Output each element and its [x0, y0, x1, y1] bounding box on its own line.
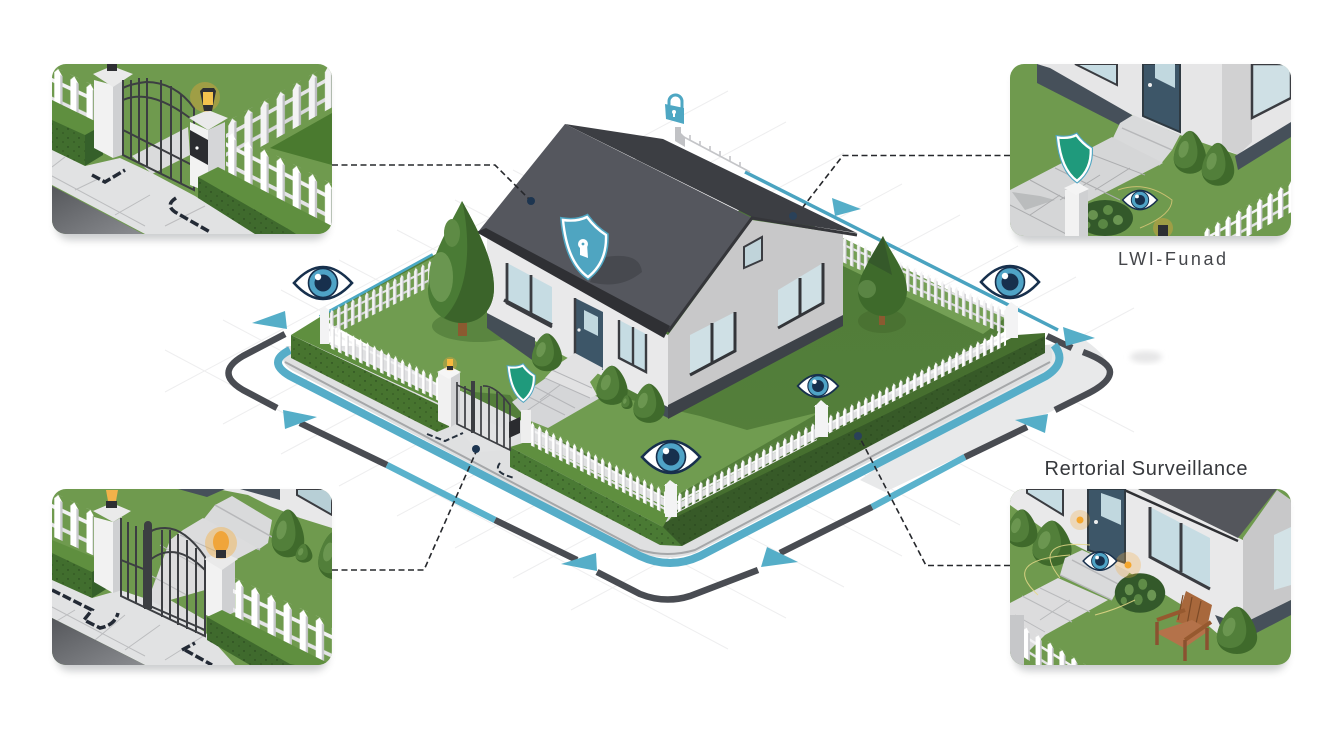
fence — [1022, 625, 1093, 701]
panel: gate detail card — [52, 63, 332, 234]
connector: lower gate card — [332, 445, 480, 570]
hedge: front-right — [660, 333, 1045, 546]
house — [476, 124, 857, 419]
cables — [92, 170, 210, 232]
eave band — [476, 228, 670, 338]
sensor lights — [1070, 510, 1141, 578]
lamp at gate — [443, 357, 457, 371]
back fence — [226, 63, 332, 166]
left fence — [52, 68, 94, 120]
fence posts — [319, 302, 1019, 517]
front fence — [226, 130, 332, 229]
icon: roof shield — [563, 217, 606, 277]
right fence — [233, 577, 334, 668]
front wall — [1010, 489, 1243, 640]
sensor eye — [1123, 190, 1157, 210]
house wall — [1037, 64, 1291, 155]
chair — [1155, 591, 1212, 661]
gable wall — [1243, 490, 1291, 625]
icon: padlock — [665, 95, 684, 124]
back perimeter line — [320, 255, 433, 317]
sidewalk — [52, 580, 235, 665]
lawn behind gate — [170, 590, 205, 620]
icon: eye yard — [798, 375, 838, 397]
window left — [1027, 489, 1063, 515]
roof — [1138, 489, 1277, 538]
main roof slope — [478, 124, 752, 332]
bushes — [272, 510, 332, 579]
back fences — [329, 259, 433, 337]
paved apron around the hedge — [860, 340, 1110, 492]
big window — [1150, 507, 1210, 589]
door — [1088, 489, 1125, 563]
tree shadow — [432, 310, 524, 342]
sensor arcs — [1118, 187, 1172, 228]
front wall foundation — [487, 313, 535, 362]
arrows on perimeter ring — [252, 198, 1095, 571]
window: attic — [744, 237, 762, 268]
gable window — [1274, 527, 1291, 590]
window: gable left — [690, 312, 737, 375]
gable foundation — [668, 315, 843, 419]
lawn — [320, 200, 1017, 505]
road — [52, 186, 143, 234]
sensor eye — [1083, 552, 1117, 570]
hedge: front-left segments — [291, 335, 682, 546]
far fence behind roof — [682, 135, 750, 172]
left hedge — [52, 100, 103, 166]
lantern — [1153, 218, 1173, 238]
left fence — [52, 492, 93, 556]
shield on post — [1058, 135, 1091, 181]
iron gate — [123, 78, 194, 190]
steps — [203, 496, 272, 550]
front hedge — [207, 610, 332, 665]
windows — [1075, 64, 1117, 85]
front hedge — [198, 167, 332, 234]
gable foundation — [1240, 600, 1291, 640]
right pillar — [189, 110, 228, 192]
round shrub — [1115, 573, 1165, 613]
door — [575, 298, 603, 370]
bush: by door — [532, 333, 562, 371]
lantern — [190, 82, 220, 112]
connector: gate card to roof — [332, 165, 535, 205]
cables — [52, 590, 212, 665]
label: front walk card: LWI-Funad — [1118, 249, 1226, 269]
right pillar — [204, 552, 238, 622]
gable wall — [668, 220, 843, 406]
lamp — [205, 527, 237, 559]
hedge: back-left top edge — [291, 317, 449, 408]
connector: territorial card — [854, 432, 1010, 566]
round shrub — [1088, 200, 1133, 236]
perimeter ring: surveillance path — [228, 334, 1110, 600]
road — [52, 618, 145, 665]
blue moat band — [278, 345, 1059, 563]
connector: front walk card to roof — [789, 156, 1010, 220]
right conifer — [858, 236, 907, 333]
house corner — [178, 489, 332, 528]
pavers — [1010, 137, 1163, 236]
front wall — [487, 238, 668, 410]
left pillar — [93, 490, 131, 593]
iron gate — [121, 518, 205, 636]
fences front — [330, 324, 1006, 514]
icon: eye left — [294, 267, 352, 299]
left pillar — [93, 64, 133, 158]
bushes — [1174, 131, 1234, 186]
cable at gate — [427, 433, 514, 478]
window: front right — [619, 320, 646, 372]
icon: eye right — [981, 266, 1039, 298]
window: gable right — [778, 263, 825, 328]
icon: gate shield — [509, 366, 534, 400]
panel: isometric property scene — [228, 95, 1110, 600]
sidewalk — [52, 150, 255, 234]
front steps and pavers — [512, 353, 603, 428]
fence — [1204, 181, 1291, 236]
roof shadows — [590, 256, 642, 284]
bushes: by porch — [596, 366, 665, 423]
steps — [1060, 550, 1130, 600]
steps — [1112, 115, 1180, 165]
gate assembly — [437, 366, 531, 452]
sensor arcs — [1025, 544, 1135, 615]
pavers — [148, 518, 258, 630]
left hedge — [52, 540, 108, 598]
door — [1143, 64, 1180, 132]
back roof slope — [565, 124, 857, 233]
tree: left conifer — [428, 201, 494, 336]
card shadows — [56, 70, 1287, 671]
post — [1064, 182, 1089, 236]
concrete plinth — [283, 345, 1052, 558]
walkway through gate — [132, 127, 190, 174]
window: front left — [504, 263, 552, 327]
panel: territorial surveillance card — [1007, 489, 1291, 701]
icon: eye front — [642, 441, 700, 473]
panel: lower gate card — [52, 489, 352, 668]
pavers — [1010, 578, 1108, 650]
label: territorial card: Rertorial Surveillance — [1044, 458, 1248, 480]
panel: front walk card — [1010, 64, 1291, 236]
shrubs — [1007, 509, 1257, 654]
